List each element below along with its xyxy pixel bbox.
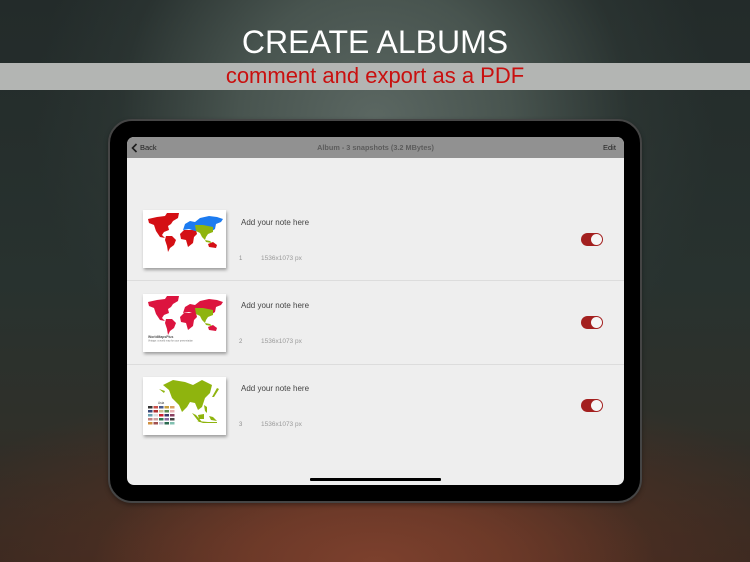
- home indicator: [310, 478, 441, 481]
- size 3: 1536x1073 px: [261, 421, 302, 428]
- thumbnail 3: Asia map with flags: Asia: [158, 401, 164, 405]
- note 3: Add your note here: [241, 384, 309, 393]
- index 1: 1: [239, 256, 242, 262]
- row divider: [127, 364, 624, 365]
- thumbnail 2: world map crimson: WorldMapsPlus: [148, 335, 173, 339]
- row divider: [127, 280, 624, 281]
- back button: Back: [140, 143, 157, 152]
- thumbnail 3: Asia map with flags: [143, 377, 226, 435]
- thumbnail 2: world map crimson: [143, 294, 226, 352]
- navigation bar: [127, 137, 624, 158]
- title: CREATE ALBUMS: [242, 24, 508, 60]
- thumbnail 2: world map crimson: Vintage: a world map for your presentation: [148, 340, 194, 342]
- subtitle band: [0, 63, 750, 90]
- thumbnail 1: world map with blue and green: [143, 210, 226, 268]
- subtitle band: comment and export as a PDF: [226, 63, 524, 88]
- toggle 3: [581, 399, 603, 412]
- album title: Album - 3 snapshots (3.2 MBytes): [317, 143, 434, 152]
- screen: [127, 137, 624, 485]
- index 2: 2: [239, 339, 242, 345]
- note 2: Add your note here: [241, 301, 309, 310]
- size 1: 1536x1073 px: [261, 255, 302, 262]
- size 2: 1536x1073 px: [261, 338, 302, 345]
- toggle 1: [581, 233, 603, 246]
- note 1: Add your note here: [241, 218, 309, 227]
- toggle 2: [581, 316, 603, 329]
- edit button: Edit: [603, 143, 616, 152]
- back button: [132, 143, 157, 152]
- tablet: [108, 119, 642, 503]
- index 3: 3: [239, 422, 242, 428]
